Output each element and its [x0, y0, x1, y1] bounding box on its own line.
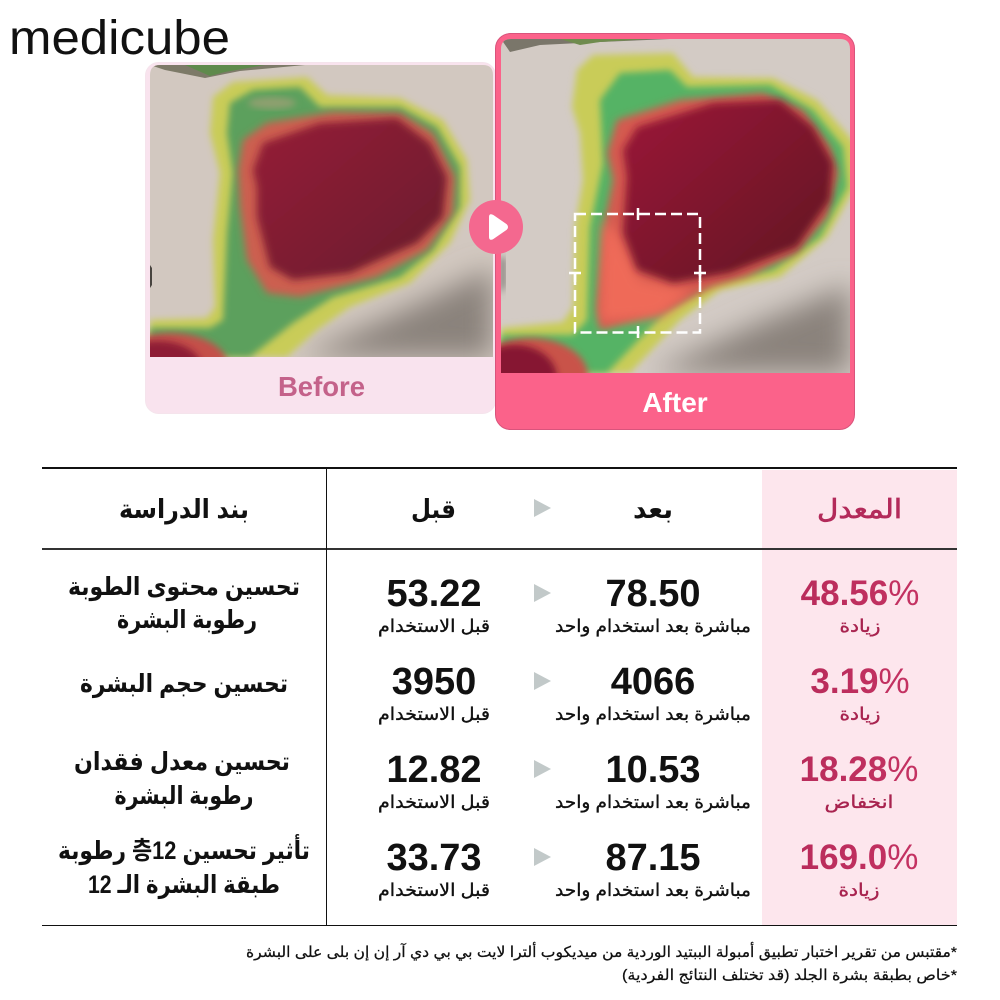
row 2: مباشرة بعد استخدام واحد [555, 704, 751, 725]
row 1: 48.56% [801, 574, 919, 613]
header row: المعدل [817, 494, 902, 524]
icon: play button [469, 200, 523, 254]
row 4: زيادة [838, 880, 880, 900]
footnotes: *مقتبس من تقرير اختبار تطبيق أمبولة الببتيد الوردية من ميديكوب ألترا لايت بي بي دي آر إن إن بلى على البشرة [246, 942, 957, 962]
row 1: مباشرة بعد استخدام واحد [555, 616, 751, 637]
row 3: تحسين معدل فقدان [74, 748, 290, 777]
row 1: قبل الاستخدام [378, 616, 490, 636]
footnotes: *خاص بطبقة بشرة الجلد (قد تختلف النتائج الفردية) [622, 967, 957, 984]
row 2: تحسين حجم البشرة [80, 670, 288, 699]
row 4: قبل الاستخدام [378, 880, 490, 900]
row 4: تأثير تحسين 층12 رطوبة [58, 834, 310, 866]
row 3: 10.53 [605, 749, 701, 791]
row 4: 33.73 [386, 837, 482, 879]
panel: before [112, 62, 496, 414]
row 3: انخفاض [824, 792, 894, 813]
row 2: 3.19% [810, 662, 910, 701]
dashed selection box [569, 208, 706, 338]
row 1: رطوبة البشرة [117, 606, 257, 635]
row 1: 53.22 [386, 573, 482, 615]
row 1: 78.50 [605, 573, 701, 615]
header row: قبل [411, 494, 456, 524]
row 3: رطوبة البشرة [114, 782, 254, 811]
header row: بند الدراسة [119, 494, 249, 524]
row 2 [80, 661, 910, 725]
label: After: After [642, 387, 708, 418]
row 4 [58, 834, 918, 901]
table [42, 467, 957, 926]
row 1: تحسين محتوى الطوبة [68, 573, 300, 602]
row 3: 18.28% [800, 750, 918, 789]
header row [119, 494, 902, 524]
row 3 [74, 748, 918, 813]
label: Before: Before [278, 371, 365, 402]
row 4: مباشرة بعد استخدام واحد [555, 880, 751, 901]
logo: medicube: medicube [9, 12, 230, 65]
row 4: 87.15 [605, 837, 701, 879]
row 2: زيادة [840, 704, 880, 724]
row 3: قبل الاستخدام [378, 792, 490, 812]
row 4: طبقة البشرة الـ 12 [88, 871, 280, 900]
heatmap photo: before [150, 65, 493, 357]
header row: بعد [633, 494, 673, 524]
row 3: مباشرة بعد استخدام واحد [555, 792, 751, 813]
row 2: قبل الاستخدام [378, 704, 490, 724]
footnotes [246, 942, 957, 984]
panel: after [472, 34, 855, 430]
rate column background [762, 470, 957, 925]
heatmap photo: after [501, 39, 850, 373]
row 1 [68, 573, 919, 637]
row 2: 3950 [392, 661, 476, 703]
row 2: 4066 [611, 661, 695, 703]
row 3: 12.82 [386, 749, 482, 791]
row 1: زيادة [840, 616, 880, 636]
row 4: 169.0% [800, 838, 918, 877]
